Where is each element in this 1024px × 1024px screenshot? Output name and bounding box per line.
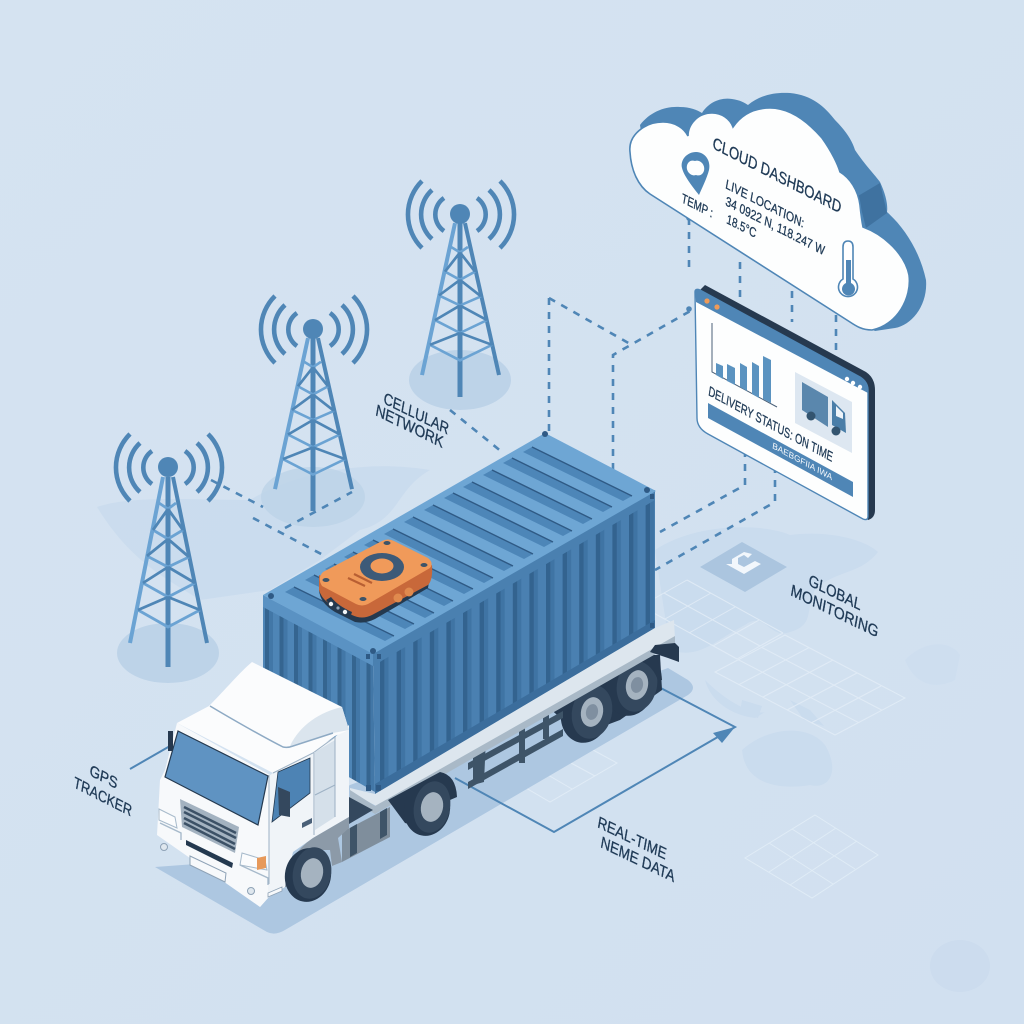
label: gps tracker: GPS <box>88 762 119 793</box>
side underrun guard <box>468 709 563 789</box>
left mirror <box>168 731 173 751</box>
tower 1 <box>116 434 222 667</box>
side window <box>272 758 310 822</box>
cloud back <box>640 93 926 331</box>
data link dashed lines <box>211 218 836 570</box>
LED strip <box>326 597 352 618</box>
location pin <box>682 152 709 195</box>
cab side <box>260 725 349 907</box>
number plate <box>190 856 226 882</box>
device side <box>319 565 432 618</box>
gps tracker device <box>319 540 432 623</box>
bolts <box>322 541 428 601</box>
air intake <box>186 840 233 868</box>
cloud face <box>630 108 909 330</box>
fog lamps <box>160 844 254 894</box>
delivery status: DELIVERY STATUS: ON TIME <box>708 383 834 465</box>
truck cab <box>157 662 349 907</box>
device top <box>320 540 432 606</box>
container <box>263 431 656 794</box>
thermometer <box>838 241 857 297</box>
rear cab wheel <box>388 772 457 840</box>
label: real-time data: NEME DATA <box>599 834 676 886</box>
tower 2 <box>261 296 367 511</box>
bumper crease <box>160 823 268 885</box>
corrugation slots <box>285 447 632 641</box>
connection dots <box>686 215 795 468</box>
corner castings <box>268 431 654 791</box>
cloud dashboard <box>630 93 926 331</box>
label: global monitoring: MONITORING <box>789 582 880 642</box>
live location: 34 0922 N, 118.247 W <box>724 193 826 259</box>
truck tile <box>795 372 852 453</box>
grille <box>180 799 239 853</box>
wheel <box>600 654 662 720</box>
label: cellular network: NETWORK <box>374 402 445 452</box>
indicator <box>257 856 266 870</box>
window buttons <box>704 298 862 389</box>
tower 3 <box>408 181 514 397</box>
label: global monitoring: GLOBAL <box>807 572 862 614</box>
headlamps <box>159 809 267 870</box>
dashboard panel <box>695 285 875 520</box>
side marker <box>268 887 282 897</box>
rear panel <box>315 740 335 830</box>
fairing <box>177 662 349 773</box>
label: gps tracker <box>72 762 133 820</box>
cloud shaded step <box>858 183 887 228</box>
tower 1 base <box>117 623 219 683</box>
status bar <box>708 403 853 497</box>
top rail shading <box>373 490 655 666</box>
panel edge <box>700 285 875 520</box>
truck ground shadow <box>155 668 693 934</box>
live location: 18.5°C <box>725 211 757 241</box>
left side face <box>263 597 375 792</box>
gps leader line <box>130 746 170 769</box>
trailer deck <box>350 620 679 814</box>
top face <box>263 433 656 654</box>
door handle <box>302 818 312 828</box>
door lines <box>269 737 335 884</box>
label: gps tracker: TRACKER <box>72 774 133 820</box>
device base <box>319 576 430 623</box>
map grid lines <box>526 580 905 898</box>
world map <box>97 466 960 787</box>
live location: TEMP : <box>680 190 714 221</box>
windshield <box>165 731 268 825</box>
front cab wheel and fender <box>280 817 349 906</box>
trailer rear wheels <box>540 650 662 747</box>
label: real-time data: REAL-TIME <box>596 814 668 864</box>
title bar <box>695 289 868 393</box>
label: cellular network: CELLULAR <box>382 390 450 439</box>
tower 2 base <box>261 467 365 527</box>
cloud heading: CLOUD DASHBOARD <box>711 134 843 217</box>
panel face <box>695 289 868 520</box>
right side face <box>373 492 655 792</box>
mirror <box>278 787 290 817</box>
tile: map icon <box>700 542 787 592</box>
bar chart <box>712 323 777 407</box>
wheel <box>555 681 617 747</box>
real-time data arrow <box>455 685 735 832</box>
status bar: BAEBGFIIA IWA <box>772 440 833 482</box>
live location: LIVE LOCATION: <box>724 176 805 231</box>
bottom rail <box>375 620 655 794</box>
faint corner spot <box>930 940 990 992</box>
live location <box>680 176 826 259</box>
fuel tank <box>342 807 390 862</box>
tower 3 base <box>409 350 511 410</box>
status ring <box>360 553 404 581</box>
cab front <box>157 723 270 907</box>
chassis <box>349 797 373 824</box>
